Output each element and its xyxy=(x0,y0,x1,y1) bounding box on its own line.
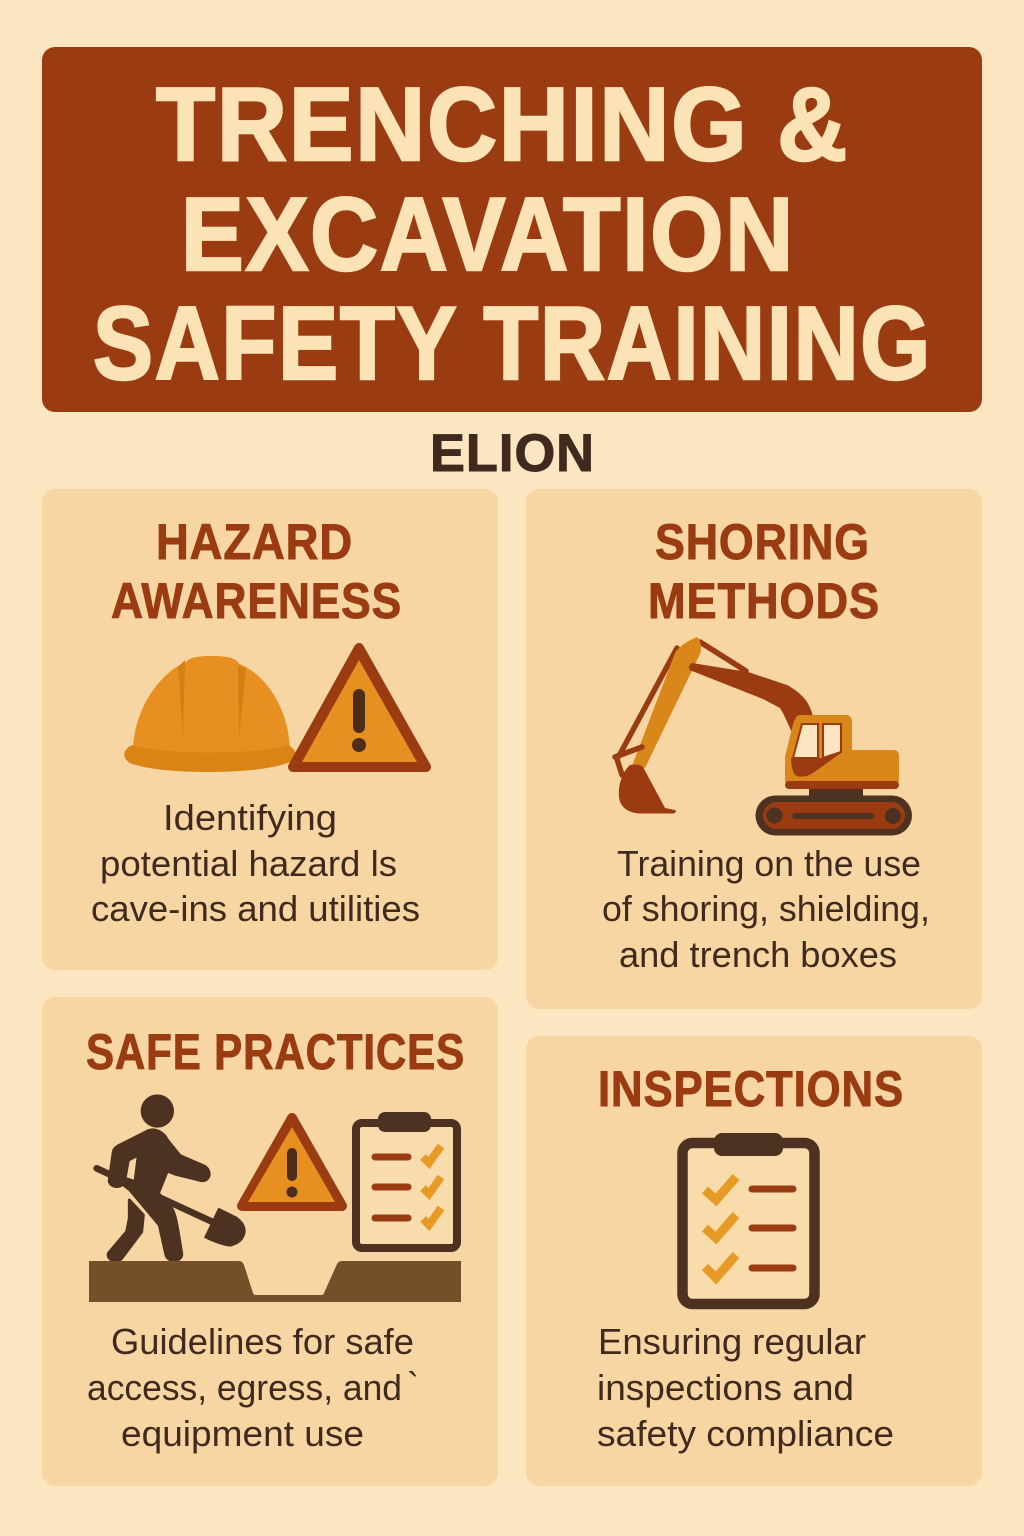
icon: warning triangle xyxy=(293,648,426,767)
icon: checklist clipboard xyxy=(682,1133,814,1304)
panel: hazard awareness xyxy=(42,489,498,970)
description: safe practices: equipment use xyxy=(121,1413,364,1454)
icon: checklist clipboard xyxy=(356,1112,457,1248)
panel: inspections xyxy=(526,1036,982,1486)
excavator stick and strut xyxy=(619,642,746,756)
description: shoring methods: Training on the use xyxy=(617,843,921,884)
description: safe practices: ` xyxy=(407,1365,419,1406)
excavator boom xyxy=(689,663,813,733)
excavator linkage xyxy=(615,747,642,775)
excavator cab and body xyxy=(785,715,899,782)
description: inspections xyxy=(597,1321,894,1454)
description: inspections: Ensuring regular xyxy=(598,1321,866,1362)
description: shoring methods: of shoring, shielding, xyxy=(602,888,930,929)
description: shoring methods: and trench boxes xyxy=(619,934,897,975)
description: hazard awareness: potential hazard ls xyxy=(100,843,397,884)
heading: hazard awareness: HAZARD xyxy=(156,514,353,570)
description: inspections: safety compliance xyxy=(597,1413,894,1454)
title line 2: EXCAVATION xyxy=(181,177,795,293)
panel: shoring methods xyxy=(526,489,982,1009)
description: inspections: inspections and xyxy=(597,1367,854,1408)
heading: safe practices: SAFE PRACTICES xyxy=(86,1024,465,1080)
excavator bucket xyxy=(619,765,676,814)
excavator track xyxy=(756,796,912,836)
panel: safe practices xyxy=(42,997,498,1486)
icon: hard hat xyxy=(124,656,296,772)
description: hazard awareness: Identifying xyxy=(163,797,337,838)
description: safe practices: Guidelines for safe xyxy=(111,1321,414,1362)
excavator cab windows xyxy=(793,724,841,758)
heading: hazard awareness xyxy=(111,514,402,629)
brand name: ELION xyxy=(430,424,595,483)
title line 1: TRENCHING & xyxy=(156,67,849,183)
excavator orange arm xyxy=(632,637,701,768)
description: safe practices xyxy=(87,1321,419,1454)
heading: hazard awareness: AWARENESS xyxy=(111,573,402,629)
description: hazard awareness: cave-ins and utilities xyxy=(91,888,420,929)
heading: shoring methods: SHORING xyxy=(655,514,870,570)
heading: inspections: INSPECTIONS xyxy=(598,1061,904,1117)
description: shoring methods xyxy=(602,843,930,975)
title banner xyxy=(42,47,982,412)
icon: warning triangle xyxy=(242,1118,342,1206)
heading: shoring methods: METHODS xyxy=(648,573,880,629)
icon: worker with shovel xyxy=(97,1094,246,1261)
heading: shoring methods xyxy=(648,514,880,629)
icon: trench ground xyxy=(89,1261,461,1302)
description: safe practices: access, egress, and xyxy=(87,1367,402,1408)
icon: excavator xyxy=(615,637,912,836)
description: hazard awareness xyxy=(91,797,420,929)
